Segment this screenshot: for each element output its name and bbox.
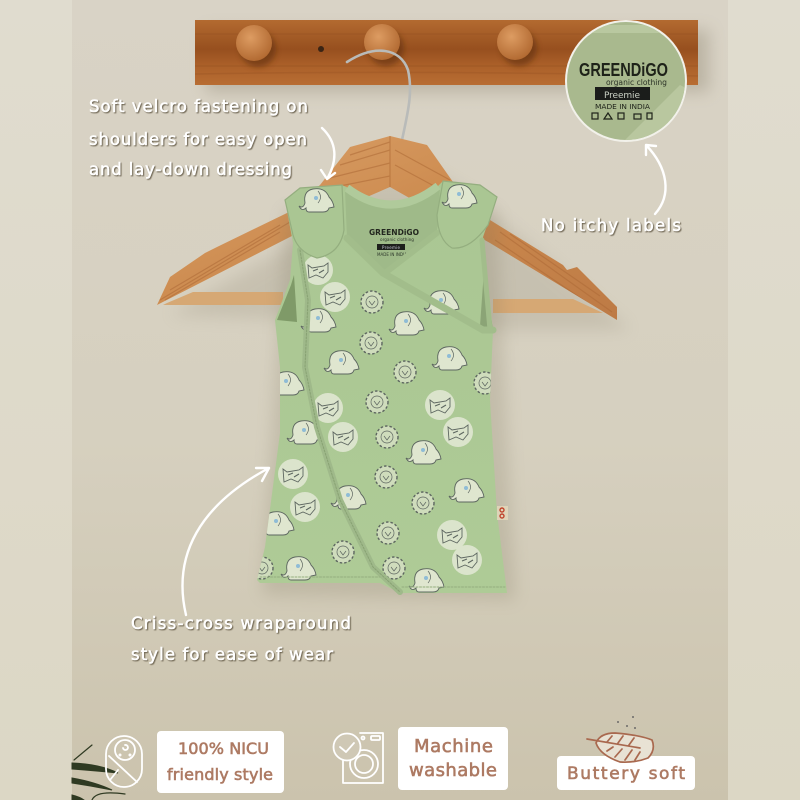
- callout: velcro fastening: Soft velcro fastening on: [89, 97, 308, 116]
- label close-up badge: organic clothing: [606, 78, 667, 87]
- garment shadow: [262, 210, 515, 600]
- tag: buttery soft: [557, 756, 695, 790]
- callout: no itchy labels: No itchy labels: [541, 216, 681, 235]
- wooden hanger: [157, 136, 617, 320]
- left shoulder velcro flap: [285, 185, 344, 258]
- wooden peg rack: [195, 20, 709, 92]
- inner neck panel: [345, 188, 440, 273]
- inner garment label: Preemie: [382, 245, 401, 250]
- tag: NICU friendly: friendly style: [167, 765, 273, 784]
- callout: wraparound style: Criss-cross wraparound: [131, 614, 351, 633]
- callout: velcro fastening: and lay-down dressing: [89, 160, 292, 179]
- tag: machine washable: Machine: [414, 736, 493, 757]
- inner garment label: organic clothing: [380, 237, 414, 243]
- metal hanger hook: [347, 51, 410, 140]
- tag: machine washable: washable: [409, 760, 497, 781]
- tag: NICU friendly: 100% NICU: [178, 739, 269, 758]
- arrow: to wrap seam: [182, 468, 269, 615]
- inner garment label: GREENDiGO: [369, 228, 419, 237]
- animal print: [251, 255, 496, 592]
- label close-up badge: [560, 20, 690, 142]
- tag: NICU friendly: [157, 731, 284, 793]
- callout: wraparound style: style for ease of wear: [131, 645, 333, 664]
- small red side tag: [497, 506, 508, 520]
- tag: machine washable: [398, 727, 508, 790]
- icon: feather: [587, 716, 653, 762]
- label close-up badge: MADE IN INDIA: [595, 103, 650, 111]
- label close-up badge: Preemie: [604, 91, 640, 101]
- wrap panel seams: [260, 233, 505, 592]
- icon: washing machine: [334, 733, 383, 783]
- left armhole: [277, 275, 297, 322]
- icon: swaddled baby: [106, 736, 142, 787]
- right shoulder velcro flap: [437, 181, 497, 248]
- label close-up badge: GREENDiGO: [579, 60, 668, 80]
- arrow: to shoulder: [321, 128, 335, 179]
- hanger shadow: [170, 150, 630, 330]
- green wrap vest: [251, 181, 508, 593]
- arrow: to label: [646, 145, 666, 214]
- neck ribbing: [347, 186, 438, 205]
- callout: velcro fastening: shoulders for easy open: [89, 130, 307, 149]
- tag: buttery soft: Buttery soft: [567, 764, 685, 784]
- right armhole: [480, 270, 493, 330]
- plant: [72, 745, 125, 800]
- garment body: [257, 181, 507, 593]
- inner garment label: [369, 228, 419, 257]
- inner garment label: MADE IN INDIA: [377, 252, 407, 257]
